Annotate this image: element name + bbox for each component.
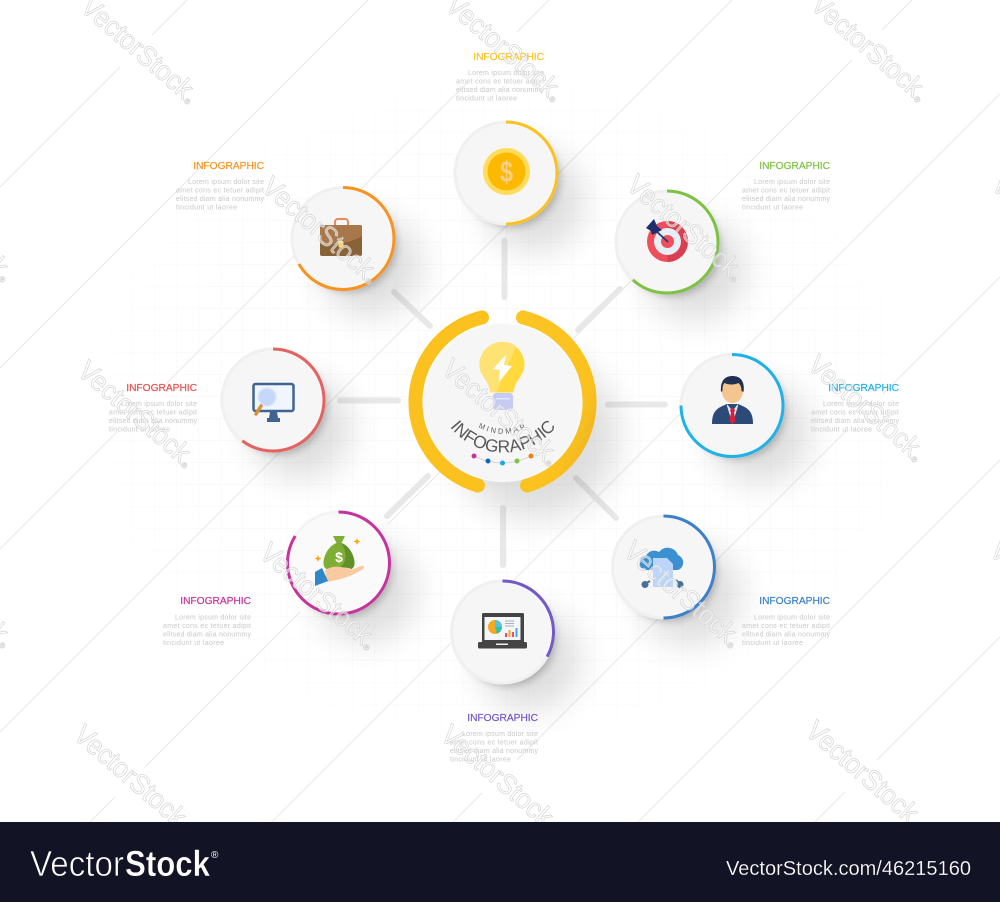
watermarks: VectorStock <box>802 349 927 463</box>
text block: sky blue: amet cons ec tetuer adipit <box>811 410 899 416</box>
panel: cloud node <box>612 516 714 618</box>
yellow right arc <box>523 317 590 486</box>
text block: red: amet cons ec tetuer adipit <box>109 410 197 416</box>
text block: top yellow <box>456 52 544 102</box>
watermarks: VectorStock <box>621 169 746 283</box>
text block: cloud blue: amet cons ec tetuer adipit <box>742 623 830 630</box>
watermarks: ® <box>547 94 557 105</box>
text block: orange: amet cons ec tetuer adipit <box>176 188 264 194</box>
watermarks: ® <box>363 276 373 287</box>
watermarks: VectorStock <box>68 719 193 833</box>
panel: person node <box>681 354 783 456</box>
text block: top yellow: INFOGRAPHIC <box>473 52 544 63</box>
text block: green: INFOGRAPHIC <box>759 161 830 172</box>
watermarks: ® <box>728 274 738 285</box>
icon: laptop with charts <box>478 613 527 648</box>
text block: purple: tincidunt ut laoree <box>450 756 511 764</box>
icon: money bag on hand: $ <box>335 549 343 565</box>
text block: purple: Lorem ipsum dolor site <box>462 731 538 738</box>
watermarks: ® <box>179 460 189 471</box>
text block: green <box>742 161 830 212</box>
text block: sky blue: INFOGRAPHIC <box>828 383 899 394</box>
text block: orange: Lorem ipsum dolor site <box>188 179 264 186</box>
text block: cloud blue: tincidunt ut laoree <box>742 640 803 647</box>
text block: top yellow: Lorem ipsum dolor site <box>468 70 544 77</box>
text block: orange: elitsed diam alia nonummy <box>176 196 264 203</box>
watermarks: ® <box>361 642 371 653</box>
text block: magenta: elitsed diam alia nonummy <box>163 632 252 638</box>
text block: cloud blue: Lorem ipsum dolor site <box>754 614 830 622</box>
text block: cloud blue: elitsed diam alia nonummy <box>742 632 830 638</box>
icon: businessman <box>712 376 753 424</box>
watermarks: ® <box>909 454 919 465</box>
INFOGRAPHIC curved label <box>445 420 561 452</box>
watermarks: VectorStock <box>435 719 560 833</box>
text block: green: tincidunt ut laoree <box>742 204 803 212</box>
watermarks: ® <box>725 640 735 651</box>
text block: red <box>109 383 198 434</box>
footer logo: Vector <box>30 843 124 884</box>
panel: money node <box>288 512 390 614</box>
text block: purple <box>450 713 538 764</box>
MINDMAP curved label <box>472 423 534 434</box>
watermarks: VectorStock <box>72 355 197 469</box>
icon: dollar coin: $ <box>500 156 513 189</box>
icon: target with dart <box>646 219 688 262</box>
text block: sky blue <box>811 383 900 434</box>
text block: magenta: INFOGRAPHIC <box>180 596 251 607</box>
text block: green: elitsed diam alia nonummy <box>742 196 830 203</box>
text block: cloud blue <box>742 596 830 647</box>
central hub: MINDMAP <box>478 423 524 434</box>
panel: top node finance <box>455 122 557 224</box>
text block: top yellow: amet cons ec tetuer adipit <box>456 78 544 86</box>
central white disc <box>424 324 582 482</box>
watermarks: VectorStock <box>436 353 561 467</box>
footer logo: Stock <box>125 843 211 884</box>
icon: light bulb <box>480 342 524 410</box>
text block: magenta: Lorem ipsum dolor site <box>175 614 251 622</box>
text block: red: elitsed diam alia nonummy <box>109 418 198 425</box>
text block: sky blue: Lorem ipsum dolor site <box>823 401 899 408</box>
text block: sky blue: elitsed diam alia nonummy <box>811 418 900 425</box>
footer url: VectorStock.com/46215160 <box>726 858 971 880</box>
text block: top yellow: tincidunt ut laoree <box>456 96 517 102</box>
text block: green: Lorem ipsum dolor site <box>754 179 830 186</box>
text block: magenta <box>163 596 252 647</box>
text block: red: tincidunt ut laoree <box>109 426 170 434</box>
panel: briefcase node <box>292 188 394 290</box>
watermarks: VectorStock <box>254 537 379 651</box>
text block: green: amet cons ec tetuer adipit <box>742 188 830 194</box>
watermarks: VectorStock <box>618 535 743 649</box>
footer logo: ® <box>211 850 219 861</box>
icon: cloud document <box>639 548 684 588</box>
footer bar <box>0 822 1000 902</box>
icon: monitor with magnifier <box>254 384 294 422</box>
icon: briefcase <box>320 219 362 256</box>
watermarks: VectorStock <box>256 171 381 285</box>
text block: red: INFOGRAPHIC <box>126 383 197 394</box>
panel: monitor node <box>222 349 324 451</box>
panel: laptop node <box>452 581 554 683</box>
text block: magenta: amet cons ec tetuer adipit <box>163 623 251 630</box>
text block: purple: INFOGRAPHIC <box>467 713 538 724</box>
text block: purple: amet cons ec tetuer adipit <box>450 740 538 746</box>
panel: target node <box>616 191 718 293</box>
central hub: INFOGRAPHIC <box>451 420 554 452</box>
text block: orange: INFOGRAPHIC <box>193 161 264 172</box>
watermarks: VectorStock <box>800 715 925 829</box>
text block: purple: elitsed diam alia nonummy <box>450 748 538 755</box>
coloured dots string <box>472 454 534 466</box>
footer logo <box>30 843 219 884</box>
text block: sky blue: tincidunt ut laoree <box>811 426 872 434</box>
text block: magenta: tincidunt ut laoree <box>163 640 224 647</box>
text block: red: Lorem ipsum dolor site <box>121 401 197 408</box>
watermarks: ® <box>543 458 553 469</box>
watermarks: ® <box>182 96 192 107</box>
yellow left arc <box>415 317 482 486</box>
watermarks: ® <box>912 94 922 105</box>
central hub <box>408 310 597 492</box>
text block: orange: tincidunt ut laoree <box>176 204 237 212</box>
text block: cloud blue: INFOGRAPHIC <box>759 596 830 607</box>
text block: orange <box>176 161 264 212</box>
text block: top yellow: elitsed diam alia nonummy <box>456 87 544 94</box>
